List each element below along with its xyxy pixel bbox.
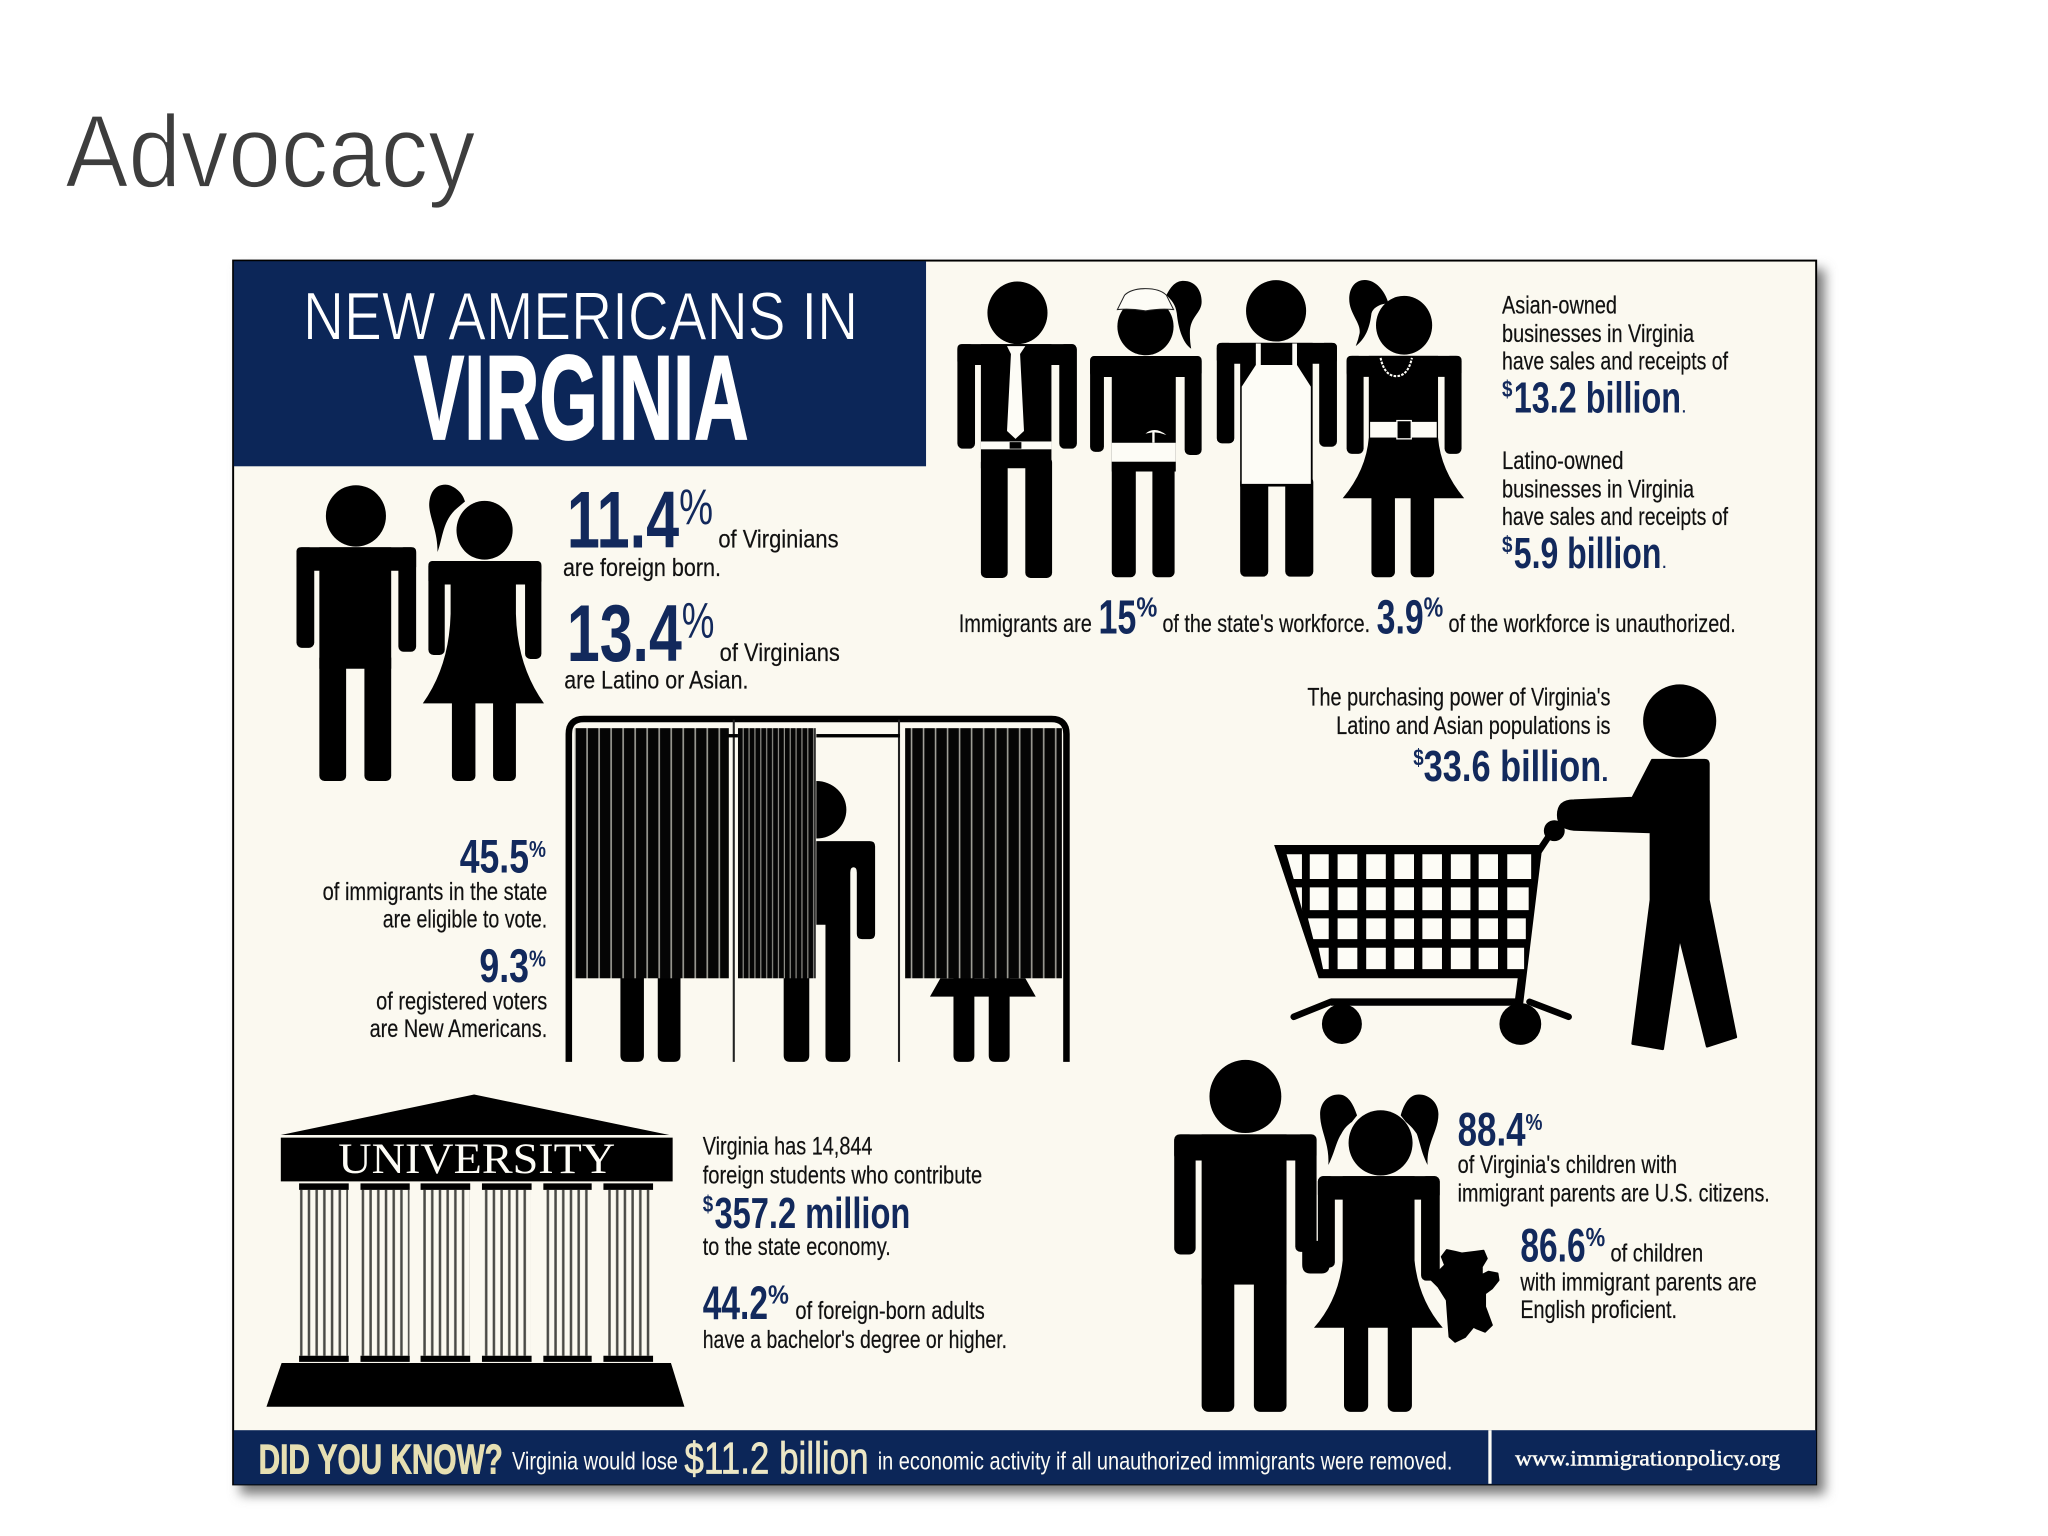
stat: workforce: % (1424, 591, 1443, 622)
stat: workforce (959, 590, 1736, 644)
stat: voters (323, 829, 547, 1043)
curtains (575, 728, 729, 978)
icon: worker with apron (1217, 280, 1337, 577)
stat: voters: % (529, 836, 546, 862)
stat: voters: 9.3 (479, 939, 529, 992)
stat: foreign students and degrees: of foreign-born adults (795, 1298, 985, 1325)
stat: children: English proficient. (1520, 1297, 1677, 1324)
stat: purchasing power (1307, 684, 1610, 791)
stat: voters: of registered voters (376, 989, 547, 1016)
stat: voters: 45.5 (460, 829, 529, 882)
stat: foreign students and degrees: 44.2 (703, 1276, 768, 1329)
shopper figure (1558, 684, 1736, 1049)
stat: purchasing power: . (1601, 757, 1609, 787)
stat: workforce: of the state's workforce. (1162, 611, 1370, 638)
stat: foreign born: 11.4 (567, 475, 679, 565)
stat: children: of Virginia's children with (1458, 1152, 1677, 1179)
stat: business receipts: $ (1502, 376, 1512, 402)
stat: business receipts (1502, 292, 1728, 578)
stat: business receipts: . (1681, 395, 1687, 418)
did you know banner: www.immigrationpolicy.org (1515, 1445, 1780, 1470)
stat: foreign students and degrees: % (768, 1280, 789, 1310)
stat: foreign born (563, 475, 839, 582)
header banner: NEW AMERICANS IN (303, 280, 858, 355)
stat: Latino or Asian: % (682, 592, 714, 648)
did you know banner (234, 1430, 1816, 1484)
child figure (1314, 1095, 1443, 1412)
parent figure (1174, 1060, 1330, 1412)
icon: worker with suit and tie (957, 281, 1077, 578)
columns (299, 1183, 653, 1362)
stat: foreign born: of Virginians (718, 526, 839, 553)
stat: children: of children (1610, 1241, 1703, 1268)
stat: workforce: 3.9 (1377, 590, 1424, 644)
stat: business receipts: businesses in Virginia (1502, 321, 1694, 348)
stat: purchasing power: Latino and Asian populations is (1336, 713, 1610, 740)
stat: voters: are New Americans. (370, 1016, 547, 1043)
stat: workforce: 15 (1098, 590, 1136, 644)
icon: shopper with cart (1274, 684, 1736, 1049)
stat: business receipts: $ (1502, 531, 1512, 557)
icon: university building (266, 1095, 684, 1407)
stat: workforce: % (1136, 591, 1157, 622)
stat: foreign students and degrees: to the state economy. (703, 1234, 891, 1261)
stat: children (1458, 1102, 1770, 1324)
icon: worker with dress and necklace (1343, 280, 1464, 577)
stat: children: with immigrant parents are (1520, 1269, 1757, 1296)
stat: Latino or Asian: 13.4 (567, 589, 682, 679)
stat: business receipts: Asian-owned (1502, 292, 1617, 319)
stat: purchasing power: 33.6 billion (1424, 743, 1601, 791)
stat: business receipts: businesses in Virginia (1502, 477, 1694, 504)
did you know banner: $11.2 billion (684, 1434, 869, 1483)
stat: business receipts: 13.2 billion (1514, 375, 1681, 423)
icon: university building: UNIVERSITY (338, 1136, 615, 1183)
stat: workforce: Immigrants are (959, 611, 1092, 638)
stat: children: % (1586, 1222, 1605, 1252)
stat: voters: are eligible to vote. (383, 906, 547, 933)
header banner: VIRGINIA (414, 331, 748, 465)
icon: man and woman (296, 485, 544, 781)
stat: foreign students and degrees: 357.2 million (714, 1190, 910, 1238)
stat: business receipts: have sales and receipts of (1502, 349, 1728, 376)
stat: foreign students and degrees: Virginia has 14,844 (703, 1134, 873, 1161)
stat: Latino or Asian: are Latino or Asian. (564, 667, 748, 694)
stat: Latino or Asian: of Virginians (720, 640, 840, 667)
stat: foreign born: are foreign born. (563, 555, 721, 582)
did you know banner: Virginia would lose (512, 1448, 678, 1475)
stat: foreign students and degrees: foreign students who contribute (703, 1162, 982, 1189)
stat: foreign students and degrees: $ (703, 1191, 713, 1217)
did you know banner: DID YOU KNOW? (259, 1435, 503, 1482)
stat: purchasing power: $ (1413, 744, 1424, 770)
title: Advocacy (65, 94, 476, 209)
stat: business receipts: 5.9 billion (1514, 530, 1661, 578)
stat: voters: % (529, 946, 546, 972)
stat: children: 88.4 (1458, 1102, 1526, 1155)
header banner (234, 261, 926, 466)
stat: children: % (1526, 1109, 1543, 1135)
stat: business receipts: have sales and receipts of (1502, 504, 1728, 531)
stat: business receipts: Latino-owned (1502, 448, 1624, 475)
teddy bear (1432, 1250, 1499, 1342)
icon: voting booth (569, 719, 1066, 1062)
hidden voter legs (620, 973, 1036, 1062)
stat: foreign students and degrees: have a bachelor's degree or higher. (703, 1327, 1007, 1354)
stat: children: immigrant parents are U.S. citizens. (1458, 1181, 1770, 1208)
stat: purchasing power: The purchasing power of Virginia's (1307, 684, 1610, 711)
panel: infographic (233, 261, 1825, 1494)
icon: worker with hard hat and tool belt (1090, 281, 1202, 577)
icon: parent and child with teddy bear (1174, 1060, 1499, 1412)
stat: foreign born: % (679, 479, 713, 535)
stat: voters: of immigrants in the state (323, 879, 547, 906)
stat: business receipts: . (1661, 550, 1667, 573)
stat: workforce: of the workforce is unauthorized. (1448, 611, 1736, 638)
stat: children: 86.6 (1520, 1219, 1586, 1272)
stat: foreign students and degrees (703, 1134, 1007, 1354)
stat: Latino or Asian (564, 589, 840, 694)
voter figure (784, 781, 875, 1062)
shopping cart (1274, 820, 1569, 1045)
icon: four workers (957, 280, 1464, 578)
did you know banner: in economic activity if all unauthorized immigrants were removed. (878, 1448, 1452, 1475)
